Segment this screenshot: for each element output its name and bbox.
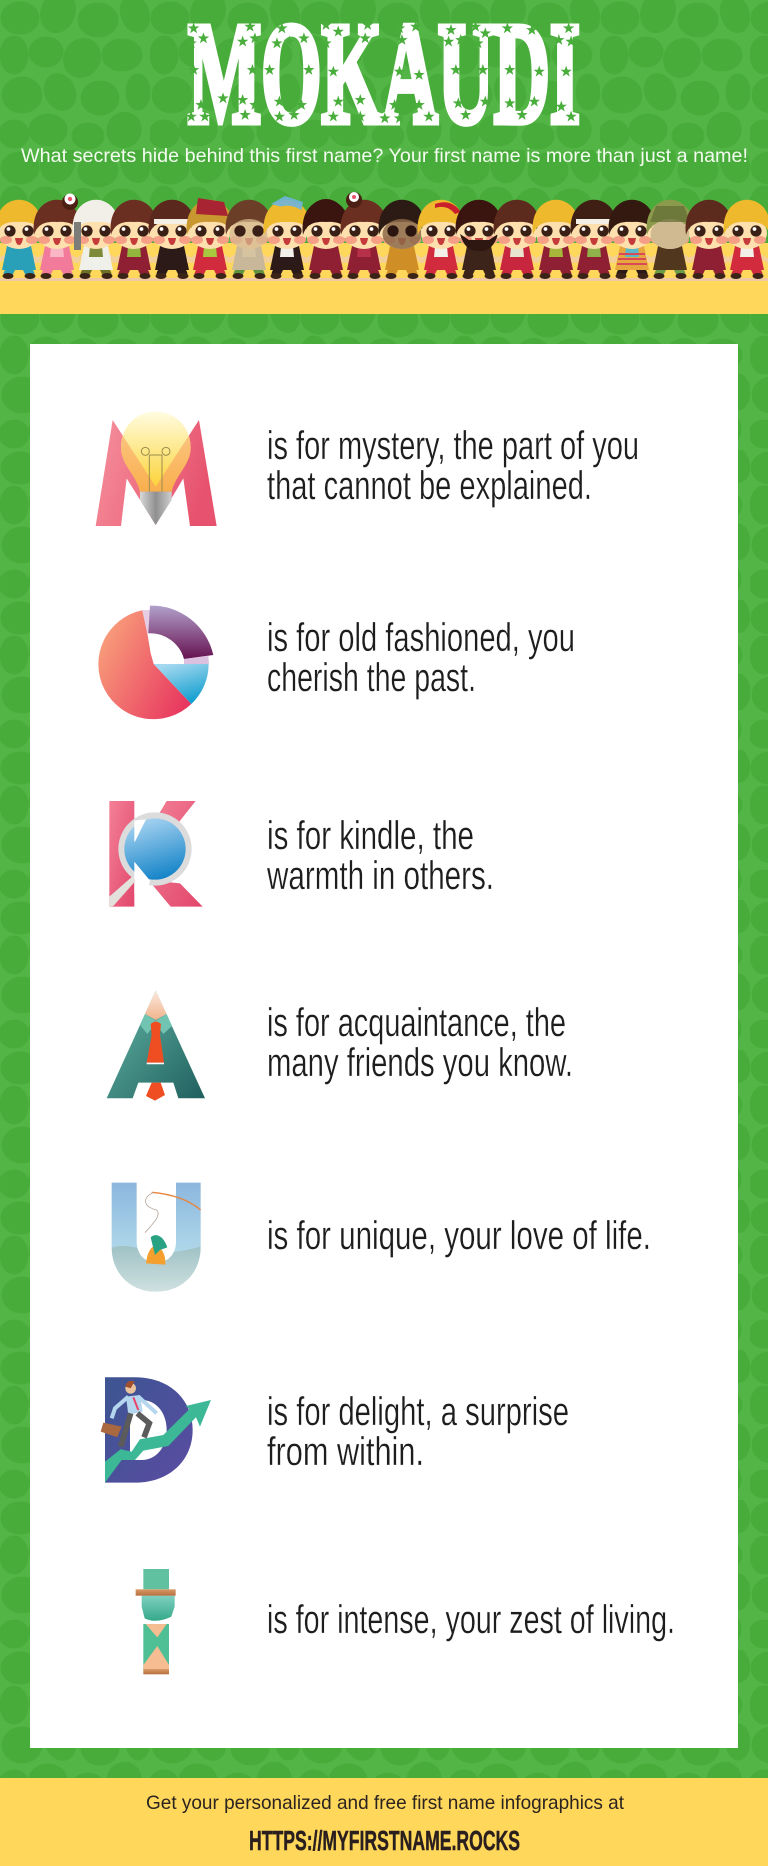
text: O line: is for old fashioned, you: [267, 616, 575, 660]
text: A line: [267, 1001, 573, 1085]
text: A line: is for acquaintance, the: [267, 1001, 566, 1045]
subtitle: What secrets hide behind this first name? Your first name is more than just a name!: [21, 145, 748, 167]
text: K line: [266, 814, 494, 898]
text: A line: many friends you know.: [267, 1041, 573, 1085]
icon: letter O as pie chart: [98, 606, 213, 719]
text: O line: cherish the past.: [267, 656, 476, 700]
icon: letter D with climbing businessman: [101, 1377, 211, 1483]
white main panel: [30, 344, 738, 1748]
footer call to action: Get your personalized and free first name infographics at: [146, 1792, 625, 1814]
text: M line: is for mystery, the part of you: [267, 424, 639, 468]
yellow band under characters: [0, 243, 768, 314]
icon: letter M with light bulb: [96, 412, 217, 526]
text: D line: from within.: [267, 1430, 424, 1474]
footer url: HTTPS://MYFIRSTNAME.ROCKS: [249, 1825, 520, 1856]
icon: letter A with tie: [107, 991, 205, 1101]
text: K line: warmth in others.: [266, 854, 494, 898]
text: M line: [267, 424, 639, 508]
icon: letter U with fishing scene: [110, 1183, 202, 1293]
row of costumed cartoon children: [0, 192, 768, 279]
ground line: [0, 278, 768, 281]
text: O line: [267, 616, 575, 700]
text: D line: is for delight, a surprise: [267, 1390, 569, 1434]
text: K line: is for kindle, the: [267, 814, 474, 858]
title: MOKAUDI: [185, 0, 580, 154]
icon: letter K with magnifying glass: [109, 801, 203, 907]
text: M line: that cannot be explained.: [267, 464, 592, 508]
text: D line: [267, 1390, 569, 1474]
icon: letter I as hourglass: [136, 1569, 176, 1674]
yellow footer band: [0, 1778, 768, 1866]
